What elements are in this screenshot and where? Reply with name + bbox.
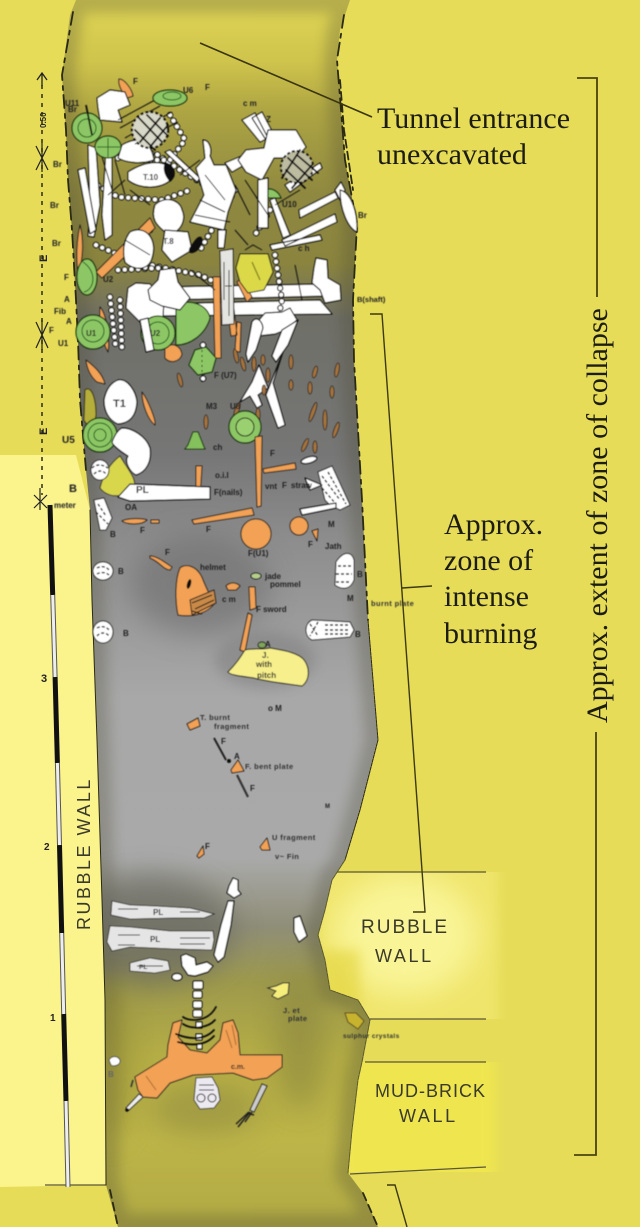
yellow jar with pitch: with (255, 660, 272, 669)
handwritten site labels: straw (291, 481, 313, 490)
scale bar with metre graduations: 2 (44, 842, 50, 853)
mid-floor fragments (187, 718, 270, 858)
disc U8 (229, 411, 261, 443)
partial bracket at bottom (387, 1185, 407, 1227)
callout: approx. extent of zone of collapse: Approx. extent of zone of collapse (581, 308, 614, 723)
handwritten site labels: F (133, 77, 138, 86)
left skeleton (78, 90, 200, 240)
handwritten site labels: c m (243, 99, 257, 108)
handwritten site labels: M (325, 804, 330, 810)
handwritten site labels: A (234, 752, 240, 761)
bracket: zone of intense burning (370, 314, 432, 912)
handwritten site labels: F (64, 273, 69, 282)
handwritten site labels: A (265, 640, 271, 649)
handwritten site labels: Z (266, 115, 271, 124)
measurement column at left (34, 73, 50, 510)
handwritten site labels: fragment (214, 722, 249, 731)
callout: tunnel entrance unexcavated (377, 102, 570, 171)
handwritten site labels: F (U7) (214, 371, 237, 380)
label: mud-brick wall: MUD-BRICK (375, 1081, 486, 1101)
handwritten site labels: vnt (265, 482, 277, 491)
handwritten site labels: ch (213, 443, 222, 452)
handwritten site labels: B (118, 567, 124, 576)
handwritten site labels: F (49, 326, 54, 335)
panel: excavated tunnel floor (62, 0, 378, 1227)
handwritten site labels: U fragment (272, 833, 316, 842)
handwritten site labels: B(shaft) (357, 295, 386, 304)
callout: approx. zone of intense burning: burning (444, 617, 537, 650)
label: rubble wall (right): WALL (375, 946, 434, 966)
pale mass under cluster (126, 283, 164, 322)
handwritten site labels: B (110, 530, 116, 539)
hatched stones (91, 455, 354, 643)
wall boundary lines (45, 872, 486, 1185)
measurement column at left: E (38, 255, 50, 262)
handwritten site labels: PL (153, 908, 163, 917)
handwritten site labels (49, 77, 414, 1079)
pommel and sword (226, 573, 261, 652)
handwritten site labels: T1 (113, 398, 126, 410)
bracket: extent of zone of collapse (574, 78, 597, 1155)
green bottle artefact (185, 432, 205, 449)
scattered rib and finger bones (176, 349, 341, 453)
handwritten site labels: B (357, 570, 363, 579)
handwritten site labels: sulphur crystals (343, 1033, 400, 1040)
label: mud-brick wall (375, 1081, 486, 1126)
label: rubble wall (right) (361, 917, 449, 966)
handwritten site labels: U6 (183, 86, 194, 95)
handwritten site labels: F(nails) (214, 488, 243, 497)
handwritten site labels: B (355, 630, 361, 639)
handwritten site labels: F (205, 83, 210, 92)
handwritten site labels: meter (54, 501, 76, 510)
label: rubble wall (left): RUBBLE WALL (74, 777, 94, 930)
handwritten site labels: U11 (65, 99, 80, 108)
white rocks (112, 428, 150, 475)
handwritten site labels: Br (50, 201, 59, 210)
handwritten site labels: A (66, 317, 72, 326)
handwritten site labels: U10 (282, 200, 297, 209)
handwritten site labels: F (308, 540, 313, 549)
handwritten site labels: o.i.l (215, 471, 229, 480)
olive leaf strip (84, 389, 96, 425)
handwritten site labels: U2 (150, 329, 161, 338)
handwritten site labels: F (205, 842, 210, 851)
orange discs (241, 517, 318, 549)
cluster: skeletons and artefacts at collapse front (49, 77, 414, 1127)
isolated fragments near bottom (109, 983, 364, 1066)
handwritten site labels: OA (125, 503, 137, 512)
callout: approx. zone of intense burning: intense (444, 580, 529, 613)
scale bar with metre graduations: 3 (41, 673, 47, 685)
callout: approx. zone of intense burning (444, 508, 543, 650)
white stone T1 (104, 380, 137, 424)
callout: approx. zone of intense burning: zone of (444, 544, 533, 577)
handwritten site labels: M (328, 520, 335, 529)
yellow jar with pitch (228, 642, 308, 686)
disc U5 (83, 418, 117, 452)
handwritten site labels: T. burnt (200, 713, 230, 722)
tunnel edge dashes (62, 12, 378, 1227)
handwritten site labels: F (221, 737, 226, 746)
scale bar with metre graduations (41, 505, 68, 1187)
handwritten site labels: F (206, 525, 211, 534)
callout: tunnel entrance unexcavated: unexcavated (377, 138, 527, 171)
handwritten site labels: Fib (54, 307, 66, 316)
green discs and shields (72, 90, 281, 385)
handwritten site labels: A (64, 295, 70, 304)
grey planks and leg bone (107, 878, 307, 980)
panel: pale left rubble wall (0, 455, 106, 1187)
handwritten site labels: c h (298, 244, 310, 253)
handwritten site labels: Jath (325, 542, 342, 551)
yellow blob (100, 456, 135, 496)
leader line: tunnel entrance (200, 43, 372, 117)
handwritten site labels: U1 (86, 329, 97, 338)
handwritten site labels: PL (150, 935, 160, 944)
callout: tunnel entrance unexcavated: Tunnel entrance (377, 102, 570, 135)
orange weapons and fragments (77, 79, 252, 384)
handwritten site labels: plate (288, 1014, 308, 1023)
orange cloak remains: c.m. (231, 1064, 245, 1071)
handwritten site labels: Br (53, 160, 62, 169)
handwritten site labels: F (282, 481, 287, 490)
handwritten site labels: F sword (256, 605, 287, 614)
panel: right mud-brick wall block (349, 1062, 490, 1172)
handwritten site labels: c m (222, 595, 236, 604)
panel: right rubble wall block (318, 872, 500, 1019)
orange cloak remains (135, 1007, 282, 1098)
central and right skeletons: T.8 (163, 237, 174, 246)
handwritten site labels: F (270, 449, 275, 458)
long bones behind cluster (160, 284, 332, 316)
yellow jar with pitch: J. (262, 651, 269, 660)
handwritten site labels: J. et (283, 1006, 300, 1015)
handwritten site labels: v~ Fin (275, 852, 299, 861)
handwritten site labels: burnt plate (371, 599, 414, 608)
central and right skeletons (124, 112, 357, 428)
handwritten site labels: Br (68, 105, 77, 114)
callout: approx. zone of intense burning: Approx. (444, 508, 543, 541)
handwritten site labels: Br (52, 239, 61, 248)
handwritten site labels: U2 (103, 275, 114, 284)
scale bar with metre graduations: 1 (50, 1013, 56, 1024)
handwritten site labels: F (165, 548, 170, 557)
handwritten site labels: jade (264, 572, 282, 581)
helmet (176, 566, 216, 616)
handwritten site labels: pommel (270, 580, 301, 589)
handwritten site labels: helmet (200, 563, 226, 572)
handwritten site labels: F (140, 526, 145, 535)
handwritten site labels: F. bent plate (245, 762, 294, 771)
handwritten site labels: M3 (206, 402, 218, 411)
handwritten site labels: U8 (230, 402, 241, 411)
plank PL (118, 484, 210, 501)
handwritten site labels: B (123, 629, 129, 638)
left skeleton: T.10 (143, 173, 159, 182)
spine and ribs (193, 981, 203, 1049)
measurement column at left: 0.50 (39, 112, 48, 128)
handwritten site labels: o M (268, 704, 282, 713)
orange bars (122, 392, 296, 570)
handwritten site labels: U5 (62, 435, 75, 446)
yellow jar with pitch: pitch (257, 671, 276, 680)
handwritten site labels: M (347, 594, 354, 603)
handwritten site labels: Br (358, 211, 367, 220)
handwritten site labels: U1 (58, 339, 69, 348)
handwritten site labels: B (108, 1070, 114, 1079)
label: rubble wall (right): RUBBLE (361, 917, 449, 938)
handwritten site labels: F(U1) (248, 549, 269, 558)
handwritten site labels: PL (136, 485, 149, 496)
label: mud-brick wall: WALL (399, 1106, 458, 1126)
handwritten site labels: PL (139, 964, 147, 971)
bead chains (92, 115, 282, 385)
handwritten site labels: F (250, 784, 255, 793)
measurement column at left: E (38, 428, 50, 435)
skull and arm bones (125, 1077, 267, 1127)
handwritten site labels: B (69, 483, 77, 495)
